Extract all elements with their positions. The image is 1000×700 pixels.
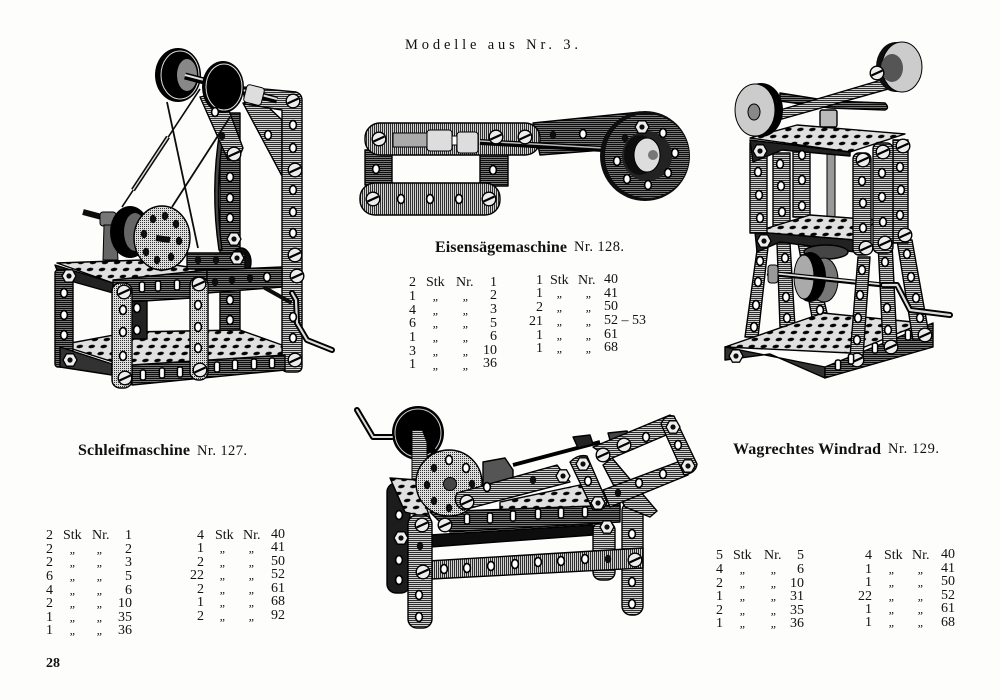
parts list: Nr. 128 right column: 40	[604, 272, 618, 287]
parts list: Nr. 127 left column: 1	[46, 610, 53, 625]
page heading: Modelle aus Nr. 3.	[405, 37, 578, 53]
parts list: Nr. 127 right column: 22	[190, 568, 204, 583]
parts list: Nr. 127 right column: „	[220, 582, 226, 596]
frame lower strip	[603, 460, 688, 507]
caption: Wagrechtes Windrad Nr. 129: Wagrechtes Windrad	[733, 441, 881, 458]
parts list: Nr. 128 right column: „	[586, 341, 592, 355]
parts list: Nr. 127 right column: 2	[197, 582, 204, 597]
parts list: Nr. 129 left column: 10	[790, 576, 804, 591]
parts list: Nr. 129 right column: Nr.	[912, 548, 930, 563]
parts list: Nr. 127 left column: Nr.	[92, 528, 110, 543]
parts list: Nr. 129 left column: Nr.	[764, 548, 782, 563]
lower plate	[725, 313, 933, 378]
parts list: Nr. 127 left column: „	[97, 569, 103, 583]
left rear upright	[387, 483, 410, 593]
parts list: Nr. 129 right column: „	[889, 562, 895, 576]
parts list: Nr. 127 left column: „	[97, 610, 103, 624]
parts list: Nr. 128 left column: 1	[409, 289, 416, 304]
parts list: Nr. 127 right column: 41	[271, 540, 285, 555]
parts list: Nr. 127 right column: 92	[271, 608, 285, 623]
parts list: Nr. 128 left column: 1	[490, 275, 497, 290]
parts list: Nr. 127 right column: „	[220, 609, 226, 623]
parts list: Nr. 127 left column: „	[97, 623, 103, 637]
parts list: Nr. 129 left column: 2	[716, 603, 723, 618]
parts list: Nr. 128 right column: „	[586, 328, 592, 342]
parts list: Nr. 127 right column: „	[249, 582, 255, 596]
parts list: Nr. 128 right column: Stk	[550, 273, 569, 288]
frame upper strip	[593, 415, 678, 459]
parts list: Nr. 127 left column: 2	[46, 528, 53, 543]
crank and wheel	[357, 406, 444, 480]
perforated upper plate	[500, 485, 620, 510]
parts list: Nr. 128 left column: „	[433, 303, 439, 317]
parts list: Nr. 129 right column: 61	[941, 601, 955, 616]
parts list: Nr. 128 right column: 21	[529, 314, 543, 329]
left plate	[390, 478, 430, 518]
parts list: Nr. 127 right column: 2	[197, 609, 204, 624]
parts list: Nr. 127 right column: 50	[271, 554, 285, 569]
caption: Schleifmaschine Nr. 127	[78, 442, 247, 459]
parts list: Nr. 127 left column: 36	[118, 623, 132, 638]
parts list: Nr. 127 right column: 40	[271, 527, 285, 542]
right wind wheel	[870, 42, 922, 92]
side connectors	[365, 150, 508, 186]
parts list: Nr. 129 left column: 4	[716, 562, 723, 577]
parts list: Nr. 127 left column: „	[97, 555, 103, 569]
lower plate	[60, 330, 282, 368]
parts list: Nr. 128 left column: 6	[490, 329, 497, 344]
parts list: Nr. 128 left column: „	[463, 344, 469, 358]
parts list: Nr. 127 right column: 61	[271, 581, 285, 596]
parts list: Nr. 127 right column: 52	[271, 567, 285, 582]
parts list: Nr. 127 left column: „	[70, 610, 76, 624]
parts list: Nr. 127 left column: 10	[118, 596, 132, 611]
parts list: Nr. 129 right column: 41	[941, 561, 955, 576]
parts list: Nr. 128 right column: „	[557, 286, 563, 300]
parts list: Nr. 127 right column: „	[249, 541, 255, 555]
parts list: Nr. 129 left column: 6	[797, 562, 804, 577]
parts list: Nr. 128 left column: „	[463, 316, 469, 330]
parts list: Nr. 127 left column	[46, 528, 132, 638]
parts list: Nr. 128 left column: 2	[490, 288, 497, 303]
caption: Eisensägemaschine Nr. 128: Nr. 128.	[574, 239, 624, 255]
parts list: Nr. 128 left column: „	[463, 303, 469, 317]
parts list: Nr. 128 left column: Nr.	[456, 275, 474, 290]
lower uprights rear	[745, 150, 828, 337]
slotted middle strip	[430, 505, 620, 532]
saw blade band	[533, 112, 673, 155]
parts list: Nr. 127 left column: „	[70, 623, 76, 637]
parts list: Nr. 129 right column: „	[918, 562, 924, 576]
parts list: Nr. 129 right column: „	[918, 589, 924, 603]
holes, screws, nuts	[729, 139, 932, 370]
parts list: Nr. 128 right column	[529, 272, 646, 356]
parts list: Nr. 127 right column: „	[249, 595, 255, 609]
central shaft	[827, 125, 835, 230]
parts list: Nr. 128 left column: 5	[490, 316, 497, 331]
parts list: Nr. 129 right column: 1	[865, 615, 872, 630]
model illustration: Eisensägemaschine	[360, 111, 690, 215]
parts list: Nr. 129 left column: 31	[790, 589, 804, 604]
parts list: Nr. 127 left column: 1	[125, 528, 132, 543]
parts list: Nr. 128 right column: 50	[604, 299, 618, 314]
frame end link	[661, 416, 697, 475]
parts list: Nr. 128 right column: 1	[536, 273, 543, 288]
pulley and crank	[767, 252, 883, 302]
lower pulley, axle and bracket	[83, 206, 190, 270]
parts list: Nr. 129 right column: 40	[941, 547, 955, 562]
parts list: Nr. 128 right column: 1	[536, 341, 543, 356]
parts list: Nr. 127 left column: 5	[125, 569, 132, 584]
model illustration: lower saw model	[357, 406, 697, 628]
left front upright	[408, 515, 432, 628]
parts list: Nr. 128 left column: 6	[409, 316, 416, 331]
parts list: Nr. 128 left column: „	[463, 289, 469, 303]
parts list: Nr. 129 right column: 52	[941, 588, 955, 603]
parts list: Nr. 129 left column: 1	[716, 589, 723, 604]
parts list: Nr. 127 left column: 6	[46, 569, 53, 584]
parts list: Nr. 127 left column: 2	[46, 542, 53, 557]
parts list: Nr. 129 right column: „	[889, 602, 895, 616]
parts list: Nr. 128 left column: 10	[483, 343, 497, 358]
parts list: Nr. 127 left column: „	[97, 596, 103, 610]
center upright	[215, 113, 240, 333]
long arm	[455, 465, 570, 510]
crank handle	[265, 288, 332, 350]
left wind wheel	[735, 83, 783, 137]
parts list: Nr. 127 left column: „	[70, 569, 76, 583]
parts list: Nr. 129 right column: 1	[865, 575, 872, 590]
screws and nuts	[62, 94, 304, 385]
parts list: Nr. 128 right column: 52 – 53	[604, 313, 646, 328]
parts list: Nr. 129 left column: 35	[790, 603, 804, 618]
parts list: Nr. 128 left column: 2	[409, 275, 416, 290]
parts list: Nr. 127 left column: 2	[125, 542, 132, 557]
parts list: Nr. 128 left column: „	[433, 330, 439, 344]
parts list: Nr. 128 right column: „	[557, 328, 563, 342]
parts list: Nr. 129 left column: Stk	[733, 548, 752, 563]
right rear upright	[593, 522, 615, 580]
parts list: Nr. 129 right column: 1	[865, 562, 872, 577]
parts list: Nr. 128 left column: 1	[409, 330, 416, 345]
parts list: Nr. 128 right column: 1	[536, 286, 543, 301]
parts list: Nr. 129 right column: 68	[941, 615, 955, 630]
parts list: Nr. 129 left column: 1	[716, 616, 723, 631]
parts list: Nr. 128 left column: Stk	[426, 275, 445, 290]
disc wheel	[416, 450, 482, 516]
parts list: Nr. 128 left column: 3	[409, 344, 416, 359]
parts list: Nr. 129 left column: „	[771, 603, 777, 617]
parts list: Nr. 128 left column: „	[463, 330, 469, 344]
parts list: Nr. 127 left column: 1	[46, 623, 53, 638]
parts list: Nr. 128 left column	[409, 275, 497, 372]
parts list: Nr. 129 left column: „	[771, 576, 777, 590]
rear block with pulley	[187, 248, 251, 276]
parts list: Nr. 129 left column: „	[740, 616, 746, 630]
parts list: Nr. 128 left column: 36	[483, 356, 497, 371]
parts list: Nr. 127 left column: „	[70, 596, 76, 610]
parts list: Nr. 129 left column: „	[771, 616, 777, 630]
parts list: Nr. 127 right column: „	[249, 555, 255, 569]
parts list: Nr. 128 left column: „	[433, 344, 439, 358]
parts list: Nr. 128 right column: „	[586, 314, 592, 328]
parts list: Nr. 127 left column: „	[97, 542, 103, 556]
parts list: Nr. 128 left column: „	[433, 316, 439, 330]
parts list: Nr. 127 right column: Stk	[215, 528, 234, 543]
parts list: Nr. 128 left column: 4	[409, 303, 416, 318]
crank handle	[883, 285, 950, 315]
parts list: Nr. 129 right column: „	[918, 615, 924, 629]
middle plate	[755, 215, 877, 259]
parts list: Nr. 128 right column: „	[586, 300, 592, 314]
holes, screws, nuts	[394, 421, 695, 621]
parts list: Nr. 128 right column: 61	[604, 327, 618, 342]
parts list: Nr. 128 left column: „	[463, 358, 469, 372]
lower horizontal strip	[412, 548, 643, 580]
strip holes	[61, 108, 296, 380]
parts list: Nr. 127 right column	[190, 527, 285, 624]
parts list: Nr. 128 right column: „	[557, 314, 563, 328]
parts list: Nr. 127 left column: 3	[125, 555, 132, 570]
caption: Schleifmaschine Nr. 127: Nr. 127.	[197, 443, 247, 459]
parts list: Nr. 128 left column: „	[433, 289, 439, 303]
parts list: Nr. 127 right column: 1	[197, 541, 204, 556]
parts list: Nr. 127 right column: 2	[197, 555, 204, 570]
parts list: Nr. 127 left column: 2	[46, 555, 53, 570]
parts list: Nr. 127 left column: 6	[125, 583, 132, 598]
caption: Eisensägemaschine Nr. 128	[435, 239, 624, 256]
parts list: Nr. 129 left column: „	[740, 603, 746, 617]
parts list: Nr. 127 right column: „	[220, 541, 226, 555]
pulley block and rod	[483, 431, 657, 517]
model illustration: Schleifmaschine	[55, 48, 332, 388]
parts list: Nr. 128 right column: 41	[604, 286, 618, 301]
parts list: Nr. 127 right column: „	[249, 609, 255, 623]
upper plate	[57, 260, 207, 283]
parts list: Nr. 129 right column: 22	[858, 589, 872, 604]
caption: Wagrechtes Windrad Nr. 129: Nr. 129.	[888, 441, 939, 457]
parts list: Nr. 127 right column: „	[249, 568, 255, 582]
parts list: Nr. 127 left column: 4	[46, 583, 53, 598]
caption: Eisensägemaschine Nr. 128: Eisensägemaschine	[435, 239, 567, 256]
parts list: Nr. 129 right column: 1	[865, 602, 872, 617]
parts list: Nr. 129 right column: 4	[865, 548, 872, 563]
parts list: Nr. 129 left column: „	[771, 589, 777, 603]
parts list: Nr. 127 right column: 4	[197, 528, 204, 543]
parts list: Nr. 127 right column: „	[220, 595, 226, 609]
parts list: Nr. 129 left column	[716, 548, 804, 631]
parts list: Nr. 127 left column: 35	[118, 610, 132, 625]
parts list: Nr. 129 right column: „	[889, 589, 895, 603]
parts list: Nr. 129 left column: 36	[790, 616, 804, 631]
parts list: Nr. 127 left column: Stk	[63, 528, 82, 543]
parts list: Nr. 129 right column: 50	[941, 574, 955, 589]
parts list: Nr. 127 right column: 1	[197, 595, 204, 610]
parts list: Nr. 129 right column: „	[918, 602, 924, 616]
parts list: Nr. 129 right column: Stk	[884, 548, 903, 563]
parts list: Nr. 128 right column: „	[557, 300, 563, 314]
parts list: Nr. 129 left column: 2	[716, 576, 723, 591]
model illustration: Wagrechtes Windrad	[725, 42, 950, 378]
parts list: Nr. 128 left column: 3	[490, 302, 497, 317]
top pulleys and axle	[155, 48, 277, 113]
parts list: Nr. 128 right column: „	[557, 341, 563, 355]
short link	[570, 456, 607, 510]
lower strip	[360, 183, 500, 215]
parts list: Nr. 128 left column: 1	[409, 357, 416, 372]
parts list: Nr. 129 left column: 5	[797, 548, 804, 563]
right frame and braces	[200, 87, 302, 372]
parts list: Nr. 128 right column: 1	[536, 328, 543, 343]
parts list: Nr. 128 right column: 2	[536, 300, 543, 315]
parts list: Nr. 127 left column: „	[97, 583, 103, 597]
parts list: Nr. 129 left column: 5	[716, 548, 723, 563]
right front upright	[622, 502, 643, 615]
frame strips	[55, 265, 285, 388]
belts and turnbuckle	[122, 89, 230, 248]
upper left upright	[750, 143, 767, 233]
parts list: Nr. 127 right column: 68	[271, 594, 285, 609]
top plate	[750, 125, 905, 162]
holes and screws	[366, 130, 586, 206]
saw rod and collars	[393, 130, 603, 153]
parts list: Nr. 128 right column: 68	[604, 340, 618, 355]
parts list: Nr. 129 left column: „	[771, 562, 777, 576]
upper strip	[365, 123, 540, 155]
parts list: Nr. 127 right column: „	[220, 555, 226, 569]
parts list: Nr. 128 left column: „	[433, 358, 439, 372]
parts list: Nr. 129 left column: „	[740, 589, 746, 603]
wheel	[600, 111, 690, 201]
parts list: Nr. 128 right column: Nr.	[578, 273, 596, 288]
caption: Schleifmaschine Nr. 127: Schleifmaschine	[78, 442, 190, 459]
wind arms	[780, 78, 892, 127]
parts list: Nr. 127 left column: „	[70, 555, 76, 569]
right uprights	[850, 140, 930, 357]
parts list: Nr. 129 left column: „	[740, 576, 746, 590]
parts list: Nr. 129 right column: „	[918, 575, 924, 589]
parts list: Nr. 127 right column: „	[220, 568, 226, 582]
parts list: Nr. 129 left column: „	[740, 562, 746, 576]
parts list: Nr. 129 right column	[858, 547, 955, 630]
parts list: Nr. 129 right column: „	[889, 575, 895, 589]
parts list: Nr. 128 right column: „	[586, 286, 592, 300]
parts list: Nr. 127 left column: „	[70, 542, 76, 556]
parts list: Nr. 127 left column: 2	[46, 596, 53, 611]
dark back strip	[430, 525, 593, 547]
parts list: Nr. 129 right column: „	[889, 615, 895, 629]
page number: 28	[46, 656, 60, 671]
parts list: Nr. 127 left column: „	[70, 583, 76, 597]
parts list: Nr. 127 right column: Nr.	[243, 528, 260, 543]
